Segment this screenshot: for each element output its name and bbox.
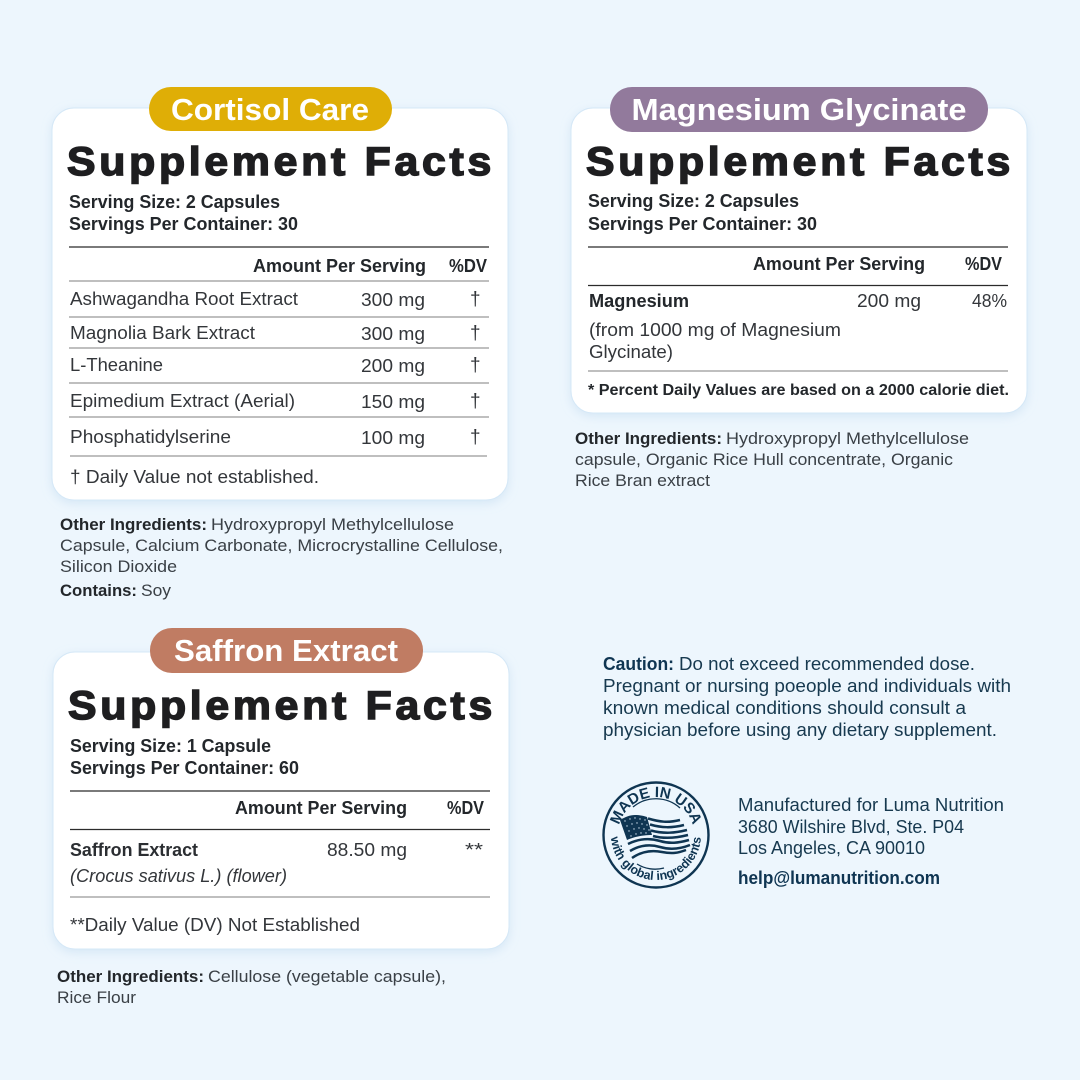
serving information: Servings Per Container: 60 <box>70 758 299 778</box>
serving information <box>70 736 299 778</box>
ingredient table: 300 mg <box>361 290 425 310</box>
ingredient table: Magnolia Bark Extract <box>70 323 255 343</box>
magnesium row: (from 1000 mg of Magnesium <box>589 320 841 340</box>
saffron row <box>70 840 490 897</box>
table header: Amount Per Serving <box>253 256 426 276</box>
ingredient table: Epimedium Extract (Aerial) <box>70 391 295 411</box>
serving information: Serving Size: 2 Capsules <box>69 192 280 212</box>
text block: Magnesium other ingredients: Hydroxypropyl Methylcellulose <box>726 429 969 448</box>
text block: caution: known medical conditions should consult a <box>603 698 967 718</box>
serving information: Serving Size: 2 Capsules <box>588 191 799 211</box>
heading: Supplement Facts: Supplement Facts <box>68 684 496 728</box>
text block: Cortisol Care other ingredients: Silicon Dioxide <box>60 557 177 576</box>
pill: Cortisol Care: Cortisol Care <box>171 92 369 127</box>
text block: Cortisol Care other ingredients <box>60 515 503 600</box>
text block: caution: Caution: <box>603 654 674 674</box>
ingredient table: † <box>470 427 481 448</box>
heading: Supplement Facts: Supplement Facts <box>586 140 1014 184</box>
badge text: Made in USA: MADE IN USA <box>610 786 701 825</box>
text block: manufacturer: Los Angeles, CA 90010 <box>738 838 925 858</box>
saffron row: ** <box>465 840 483 860</box>
ingredient table <box>69 281 489 456</box>
heading: Supplement Facts: Supplement Facts <box>67 140 495 184</box>
panel: Cortisol Care <box>52 87 508 500</box>
text block: manufacturer: 3680 Wilshire Blvd, Ste. P04 <box>738 817 964 837</box>
text block: manufacturer: Manufactured for Luma Nutrition <box>738 795 1004 815</box>
table header <box>588 247 1008 286</box>
ingredient table: 300 mg <box>361 324 425 344</box>
saffron row: (Crocus sativus L.) (flower) <box>70 866 287 886</box>
text block: manufacturer <box>738 795 1004 888</box>
pill: Saffron Extract: Saffron Extract <box>174 633 398 668</box>
text block: Cortisol Care other ingredients: Soy <box>141 581 172 600</box>
text block: caution: Pregnant or nursing poeople and individuals with <box>603 676 1011 696</box>
table header: %DV <box>449 256 487 276</box>
pill: Saffron Extract <box>150 628 423 673</box>
ingredient table: † <box>470 355 481 376</box>
text block: Cortisol Care other ingredients: Contains: <box>60 581 137 600</box>
text block: Magnesium other ingredients: Other Ingredients: <box>575 429 722 448</box>
serving information: Servings Per Container: 30 <box>588 214 817 234</box>
pill: Magnesium Glycinate: Magnesium Glycinate <box>632 92 966 127</box>
text block: Cortisol Care other ingredients: Capsule, Calcium Carbonate, Microcrystalline Cellulose, <box>60 536 503 555</box>
ingredient table: 200 mg <box>361 356 425 376</box>
icon: waving flag <box>620 815 690 858</box>
text block: Magnesium other ingredients <box>575 429 969 490</box>
table header: Amount Per Serving <box>753 254 925 274</box>
serving information: Serving Size: 1 Capsule <box>70 736 271 756</box>
badge text: with global ingredients: with global ingredients <box>611 836 701 880</box>
text block: manufacturer: help@lumanutrition.com <box>738 868 940 888</box>
ingredient table: 150 mg <box>361 392 425 412</box>
ingredient table: L-Theanine <box>70 355 163 375</box>
magnesium row: Magnesium <box>589 291 689 311</box>
table header: %DV <box>447 798 484 818</box>
footnote: **Daily Value (DV) Not Established <box>70 915 360 935</box>
ingredient table: Ashwagandha Root Extract <box>70 289 298 309</box>
magnesium row <box>588 291 1008 371</box>
saffron row: Saffron Extract <box>70 840 198 860</box>
icon: Made in USA badge <box>602 781 710 889</box>
pill: Cortisol Care <box>149 87 392 131</box>
magnesium row: 200 mg <box>857 291 921 311</box>
text block: Cortisol Care other ingredients: Hydroxypropyl Methylcellulose <box>211 515 454 534</box>
pill: Magnesium Glycinate <box>610 87 988 132</box>
text block: Magnesium other ingredients: capsule, Organic Rice Hull concentrate, Organic <box>575 450 954 469</box>
ingredient table: † <box>470 323 481 344</box>
text block: caution: Do not exceed recommended dose. <box>679 654 975 674</box>
ingredient table: 100 mg <box>361 428 425 448</box>
table header <box>69 247 489 276</box>
text block: caution: physician before using any dietary supplement. <box>603 720 997 740</box>
text block: Cortisol Care other ingredients: Other Ingredients: <box>60 515 207 534</box>
ingredient table: † <box>470 391 481 412</box>
serving information: Servings Per Container: 30 <box>69 214 298 234</box>
table header: %DV <box>965 254 1002 274</box>
serving information <box>588 191 817 234</box>
text block: caution <box>603 654 1011 740</box>
footnote: † Daily Value not established. <box>70 467 319 487</box>
text block: Saffron other ingredients <box>57 967 446 1007</box>
table header <box>70 791 490 830</box>
panel: Magnesium Glycinate <box>571 87 1027 413</box>
text block: Saffron other ingredients: Rice Flour <box>57 988 136 1007</box>
footnote: * Percent Daily Values are based on a 2000 calorie diet. <box>588 382 1009 399</box>
ingredient table: Phosphatidylserine <box>70 427 231 447</box>
serving information <box>69 192 298 234</box>
magnesium row: Glycinate) <box>589 342 673 362</box>
magnesium row: 48% <box>972 291 1007 311</box>
panel: Saffron Extract <box>53 628 509 949</box>
text block: Magnesium other ingredients: Rice Bran extract <box>575 471 710 490</box>
text block: Saffron other ingredients: Other Ingredients: <box>57 967 204 986</box>
ingredient table: † <box>470 289 481 310</box>
saffron row: 88.50 mg <box>327 840 407 860</box>
text block: Saffron other ingredients: Cellulose (vegetable capsule), <box>208 967 446 986</box>
table header: Amount Per Serving <box>235 798 407 818</box>
